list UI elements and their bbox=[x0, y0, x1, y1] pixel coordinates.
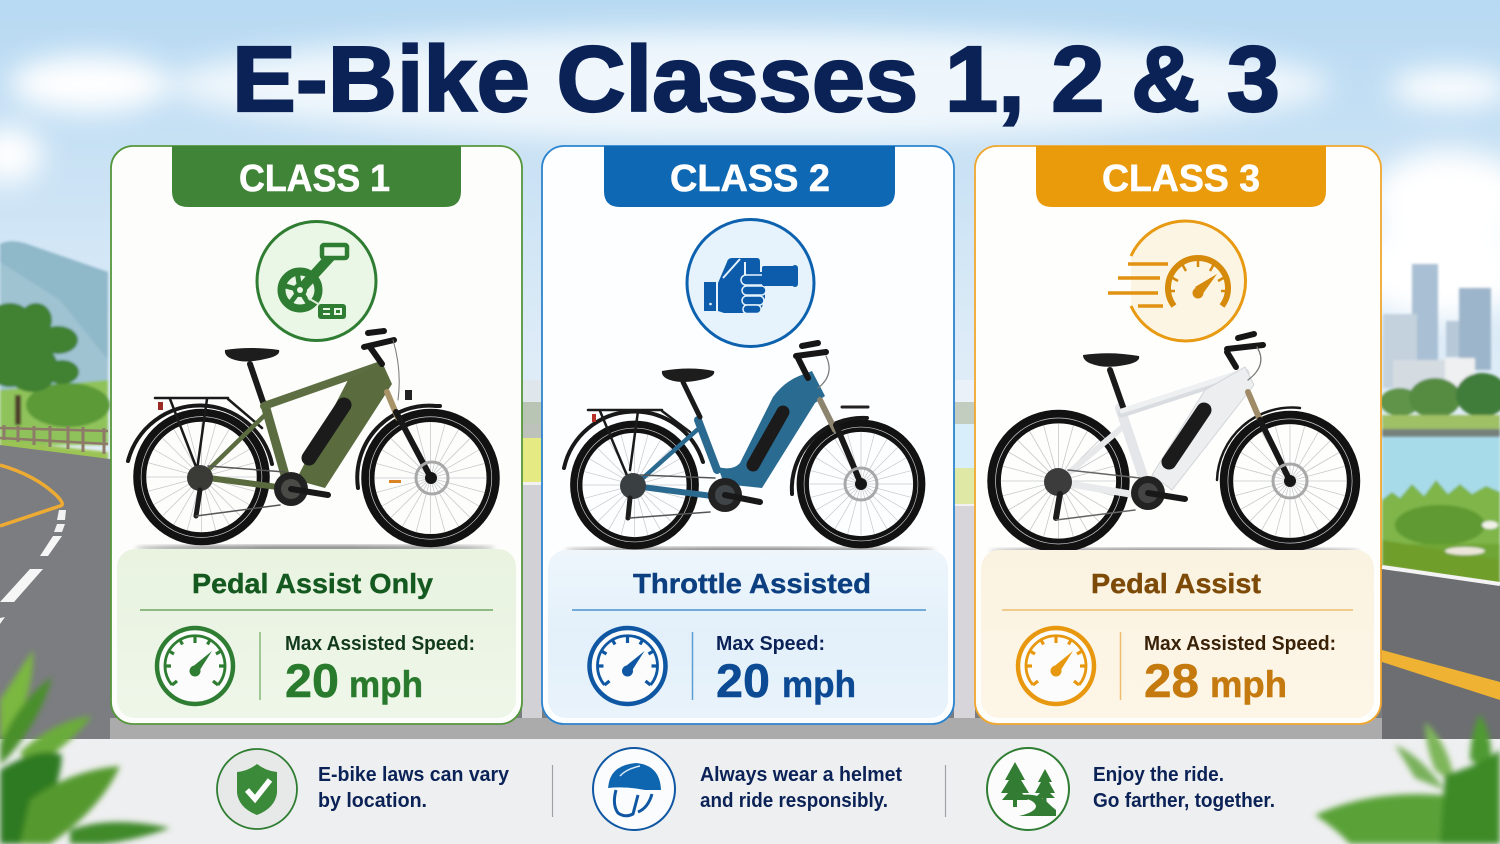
panel: pedal assist 28 details bbox=[981, 550, 1374, 718]
note text: by location. bbox=[318, 790, 427, 812]
icon: shield bbox=[217, 749, 297, 829]
note text: and ride responsibly. bbox=[700, 790, 888, 812]
speed value: 20 bbox=[285, 654, 339, 707]
panel: throttle details bbox=[548, 550, 948, 718]
speed value: mph bbox=[1210, 664, 1287, 705]
icon: throttle hand bbox=[687, 220, 814, 346]
icon: speedometer bbox=[1018, 628, 1094, 704]
panel: class 3 bbox=[975, 146, 1381, 724]
note text: Go farther, together. bbox=[1093, 790, 1275, 812]
class 3 header: CLASS 3 bbox=[1102, 158, 1260, 200]
speed value: 28 bbox=[1144, 654, 1199, 707]
panel: class 2 bbox=[542, 146, 954, 724]
icon: speedometer bbox=[590, 628, 666, 704]
class 2 header: CLASS 2 bbox=[670, 158, 830, 200]
class 3 header bbox=[1036, 146, 1326, 207]
panel: pedal assist details bbox=[117, 549, 516, 718]
plant left bbox=[0, 650, 170, 844]
class 1 header bbox=[172, 146, 461, 207]
icon: trees and path bbox=[987, 748, 1069, 830]
fence bbox=[0, 425, 108, 454]
panel: class 1 bbox=[111, 146, 522, 724]
speed label: Max Assisted Speed: bbox=[1144, 633, 1336, 655]
mode label: Pedal Assist Only bbox=[192, 568, 433, 599]
speed value: mph bbox=[782, 664, 856, 705]
road bbox=[0, 445, 1500, 739]
speed label: Max Assisted Speed: bbox=[285, 633, 475, 655]
note: laws bbox=[217, 749, 510, 829]
right landscape bbox=[1380, 264, 1500, 739]
class 1 header: CLASS 1 bbox=[239, 158, 390, 200]
road markings left bbox=[0, 465, 66, 624]
note text: Always wear a helmet bbox=[700, 764, 902, 786]
speed value: 20 bbox=[716, 654, 770, 707]
icon: speedometer bbox=[157, 628, 233, 704]
class 2 header bbox=[604, 146, 895, 207]
speed label: Max Speed: bbox=[716, 633, 825, 655]
mode label: Throttle Assisted bbox=[633, 568, 871, 599]
mode label: Pedal Assist bbox=[1091, 568, 1261, 599]
note text: E-bike laws can vary bbox=[318, 764, 510, 786]
bike: class 1 green bbox=[128, 331, 495, 550]
note: nature bbox=[987, 748, 1275, 830]
plant right bbox=[1315, 714, 1500, 844]
speed value: mph bbox=[349, 664, 423, 705]
bike: class 3 white bbox=[990, 334, 1360, 554]
gap scenery between cards bbox=[110, 380, 1382, 740]
icon: helmet bbox=[593, 748, 675, 830]
footer strip bbox=[0, 739, 1500, 844]
clouds bbox=[0, 30, 1500, 320]
icon: fast speedometer bbox=[1108, 221, 1246, 341]
title: E-Bike Classes 1, 2 & 3 bbox=[232, 27, 1280, 131]
note: helmet bbox=[593, 748, 902, 830]
icon: pedal crank bbox=[257, 222, 376, 340]
bike: class 2 blue bbox=[564, 343, 935, 552]
note text: Enjoy the ride. bbox=[1093, 764, 1224, 786]
left landscape bbox=[0, 241, 110, 460]
